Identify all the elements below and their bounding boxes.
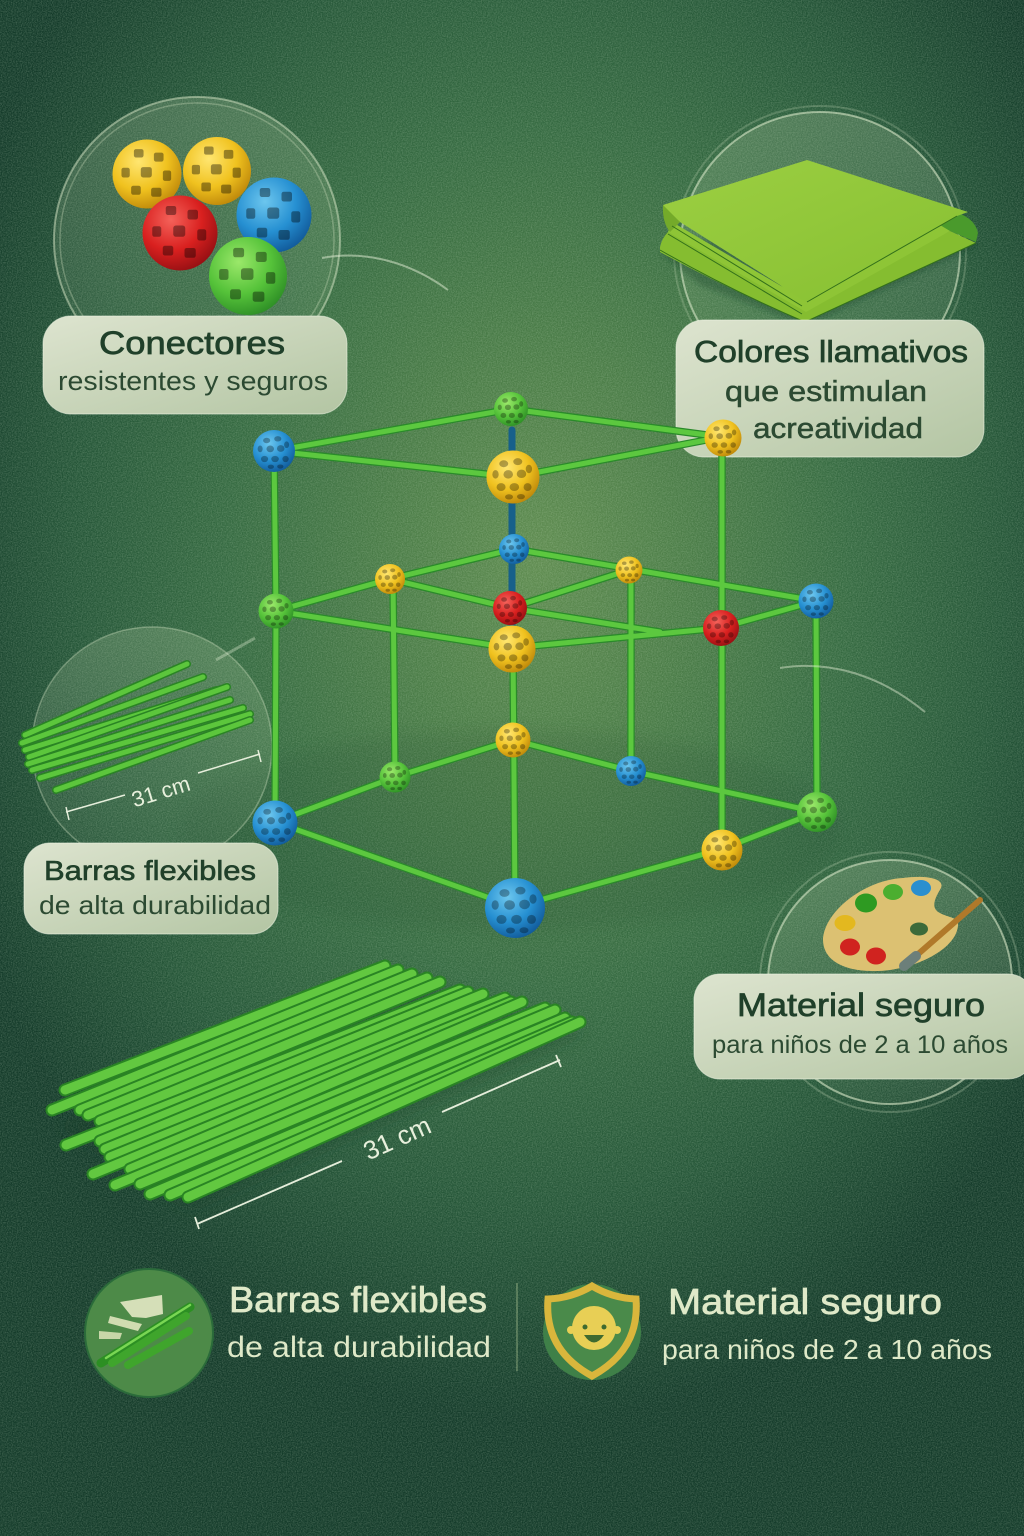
label: material xyxy=(694,974,1024,1079)
label: colores: acreatividad xyxy=(753,413,923,445)
label: colores: que estimulan xyxy=(725,376,927,408)
label: conectores xyxy=(43,316,347,414)
label: conectores: Conectores xyxy=(99,325,285,361)
footer: material seguro xyxy=(543,1281,992,1380)
dimension: 31 cm large: 31 cm xyxy=(359,1110,435,1166)
label: barras: Barras flexibles xyxy=(44,855,256,886)
icon: folded cloth xyxy=(660,160,980,326)
label: conectores: resistentes y seguros xyxy=(58,366,328,396)
dimension: 31 cm small: 31 cm xyxy=(129,771,193,812)
label: colores xyxy=(676,320,984,457)
bubble: palette xyxy=(760,852,1020,1112)
text: barras flexibles xyxy=(227,1279,491,1364)
footer: barras flexibles xyxy=(85,1269,491,1397)
panel: barras side xyxy=(22,627,278,934)
bubble: cloth xyxy=(673,105,967,323)
dimension: 31 cm large xyxy=(195,1055,561,1229)
label: material: Material seguro xyxy=(737,987,985,1023)
illustration: large sticks bundle xyxy=(52,966,585,1208)
panel: material xyxy=(694,852,1024,1112)
label: barras xyxy=(24,843,278,934)
text: material seguro: para niños de 2 a 10 años xyxy=(662,1334,992,1365)
text: barras flexibles: Barras flexibles xyxy=(229,1279,487,1320)
icon: connector balls xyxy=(112,137,312,315)
label: colores: Colores llamativos xyxy=(694,334,968,369)
bubble: conectores xyxy=(53,96,448,316)
icon: palette xyxy=(823,877,980,971)
label: material: para niños de 2 a 10 años xyxy=(712,1031,1008,1059)
text: material seguro xyxy=(662,1281,992,1365)
label: barras: de alta durabilidad xyxy=(39,890,271,920)
frame rods xyxy=(274,409,817,907)
text: material seguro: Material seguro xyxy=(668,1281,942,1322)
text: barras flexibles: de alta durabilidad xyxy=(227,1331,491,1364)
panel: conectores xyxy=(43,97,448,414)
icon: small sticks bundle xyxy=(22,664,250,790)
icon: shield badge xyxy=(543,1284,641,1380)
bubble: barras xyxy=(32,627,272,867)
panel: colores xyxy=(660,106,984,457)
dimension: 31 cm small xyxy=(66,750,261,820)
connectors xyxy=(252,392,837,938)
icon: sticks badge xyxy=(85,1269,213,1397)
chart: assembled frame xyxy=(252,392,925,938)
